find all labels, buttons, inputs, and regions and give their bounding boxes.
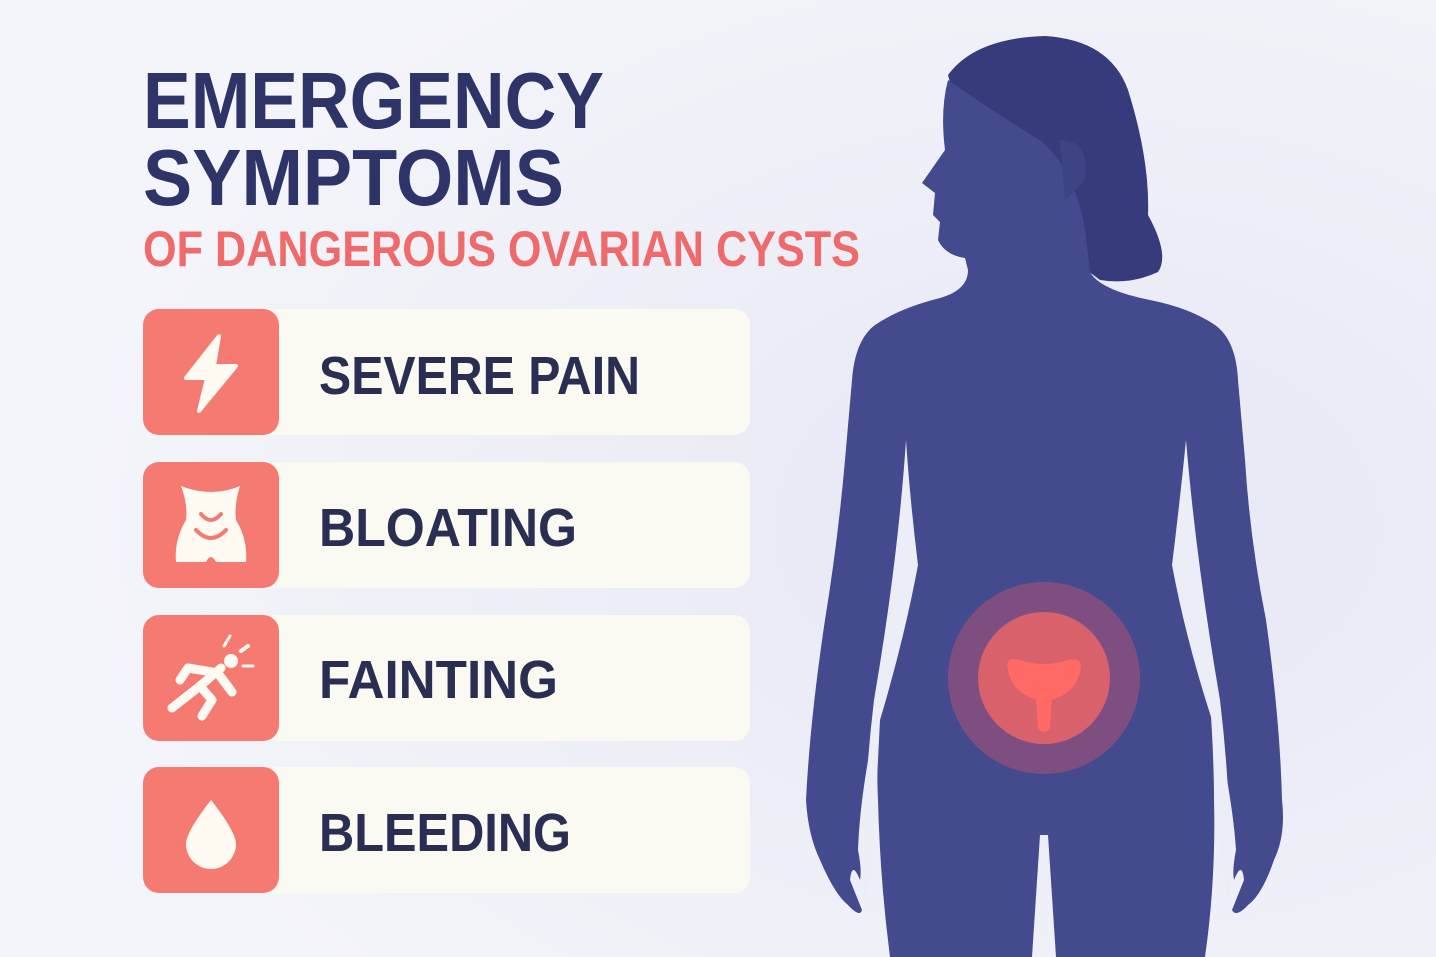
subtitle: OF DANGEROUS OVARIAN CYSTS	[143, 221, 860, 277]
icon: fainting person	[172, 636, 253, 716]
icon: drop	[186, 800, 236, 869]
title: EMERGENCY	[143, 56, 604, 145]
card: fainting	[143, 615, 750, 741]
card: bloating: BLOATING	[319, 498, 577, 558]
arm gaps	[864, 440, 918, 895]
card: severe pain	[143, 309, 750, 435]
card: severe pain: SEVERE PAIN	[319, 346, 640, 406]
card: bloating	[143, 462, 750, 588]
body	[806, 80, 1283, 957]
hair	[948, 36, 1162, 281]
title	[143, 56, 604, 222]
title: SYMPTOMS	[143, 133, 564, 222]
callout: pain glow with uterus	[948, 582, 1140, 774]
icon: lightning	[186, 336, 236, 411]
card: fainting: FAINTING	[319, 650, 558, 710]
icon: belly	[176, 486, 246, 562]
card: bleeding: BLEEDING	[319, 803, 571, 863]
woman silhouette	[806, 36, 1283, 957]
card: bleeding	[143, 767, 750, 893]
